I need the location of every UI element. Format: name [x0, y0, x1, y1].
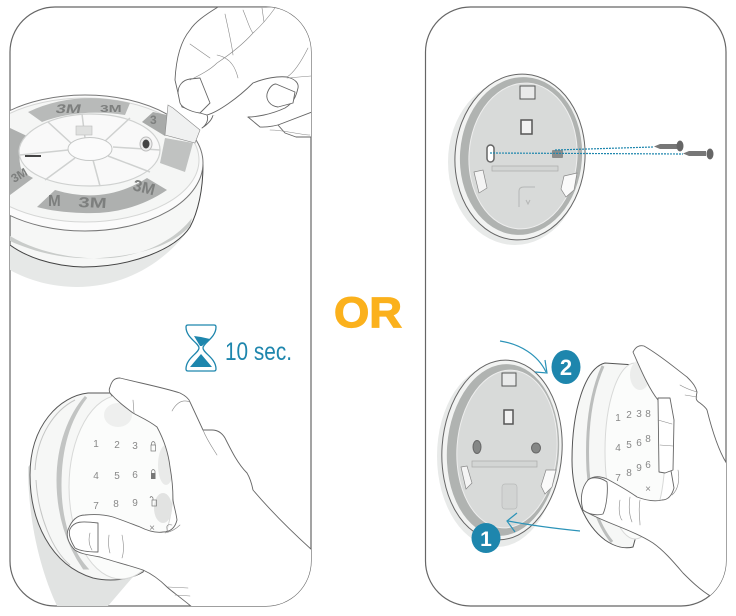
keypad digits: 6	[132, 470, 138, 481]
keypad digits: 9	[132, 498, 138, 509]
badge 1	[472, 523, 500, 553]
keypad digits: 5	[626, 440, 632, 451]
keypad digits: 3	[636, 409, 642, 420]
keypad digits: 6	[645, 460, 651, 471]
back plate	[436, 356, 568, 547]
keypad digits: 3	[132, 441, 138, 452]
keypad digits: ×	[149, 523, 155, 534]
keypad digits: 9	[636, 463, 642, 474]
illustration: hand pressing keypad onto wall	[28, 378, 312, 607]
3M pad: right, peeled	[142, 105, 200, 172]
keypad digits: 8	[645, 434, 651, 445]
keypad digits	[615, 409, 651, 495]
keypad digits: 4	[615, 443, 621, 454]
keypad digits: 1	[615, 413, 621, 424]
keypad digits: 2	[626, 410, 632, 421]
text: 10 sec.: 10 sec.	[225, 338, 292, 366]
keypad digits: 7	[93, 501, 99, 512]
hand gripping keypad	[67, 378, 312, 607]
keypad being fitted	[572, 360, 665, 548]
arrow 1	[507, 513, 580, 532]
badge 1: 1	[480, 528, 492, 551]
3M pad: bottom: 3M	[131, 177, 157, 199]
3M pad: top	[28, 98, 130, 122]
hourglass icon	[186, 325, 216, 371]
3M pad: left: 3M	[8, 165, 30, 186]
keypad digits: 1	[93, 439, 99, 450]
3M pad: right, peeled: 3	[150, 113, 157, 127]
mounting plate with spokes	[19, 114, 160, 186]
keypad digits: 4	[93, 471, 99, 482]
heading: OR: OR	[334, 289, 402, 337]
badge 2	[552, 350, 580, 384]
keypad digits: 7	[615, 473, 621, 484]
screw 1	[654, 140, 684, 152]
keypad digits: 8	[113, 499, 119, 510]
keypad digits: 2	[114, 440, 120, 451]
3M pad: top: 3M	[54, 103, 82, 116]
hand holding keypad	[580, 345, 726, 596]
keypad digits: 8	[626, 468, 632, 479]
3M pad: bottom: M	[48, 193, 61, 210]
keypad digits	[93, 439, 156, 534]
keypad digits: 6	[636, 438, 642, 449]
panel: right, screw mounting	[426, 7, 736, 616]
screw 2	[683, 148, 714, 160]
3M pad: bottom	[37, 177, 167, 213]
keypad digits: ×	[645, 484, 651, 495]
3M pad: left	[8, 128, 33, 195]
dotted guide lines	[490, 147, 683, 154]
arrow 2	[500, 341, 547, 373]
badge 2: 2	[560, 355, 572, 380]
illustration: keypad underside with 3M pads	[0, 7, 312, 287]
keypad digits: 8	[645, 409, 651, 420]
hand peeling pad	[175, 7, 312, 137]
keypad digits: 5	[114, 471, 120, 482]
3M pad: top: 3M	[100, 103, 122, 114]
illustration: back plate with screws	[448, 70, 714, 245]
illustration: keypad clipped onto back plate	[437, 340, 726, 596]
3M pad: bottom: 3M	[78, 194, 107, 211]
panel: left, adhesive mounting	[0, 7, 312, 607]
